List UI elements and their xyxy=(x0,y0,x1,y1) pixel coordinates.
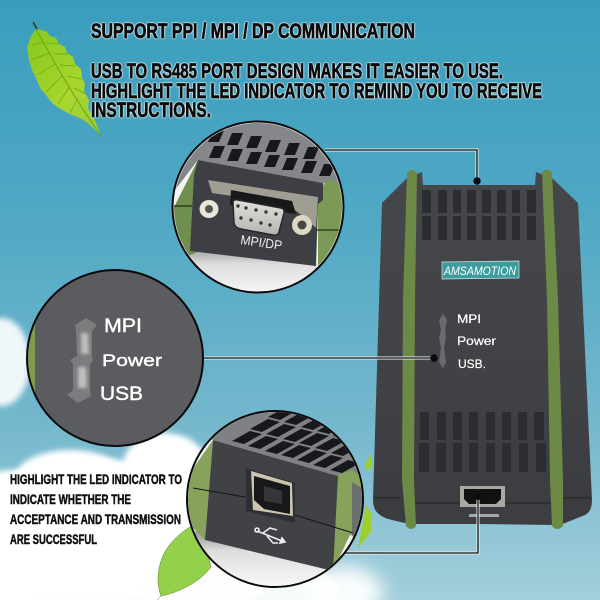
bottom vents xyxy=(419,412,546,472)
slots xyxy=(208,130,335,176)
USB port xyxy=(460,486,505,517)
light pipes xyxy=(67,318,97,403)
top vents xyxy=(422,190,536,240)
brand label: AMSAMOTION xyxy=(443,266,517,278)
clouds xyxy=(0,318,383,600)
LED caption: ACCEPTANCE AND TRANSMISSION xyxy=(10,511,181,527)
device lower front band xyxy=(414,478,553,524)
brand label xyxy=(442,261,519,279)
right green strap xyxy=(542,170,563,529)
device xyxy=(373,170,592,529)
slots xyxy=(232,412,356,473)
leaf fragments behind USB circle xyxy=(358,453,372,548)
white shelf xyxy=(184,247,318,282)
MPI Power USB labels xyxy=(100,316,162,405)
heading and description: SUPPORT PPI / MPI / DP COMMUNICATION xyxy=(91,20,415,43)
leaf bottom centre xyxy=(157,527,211,600)
white shelf xyxy=(194,531,330,586)
heading and description: INSTRUCTIONS. xyxy=(91,99,211,122)
seams xyxy=(172,206,345,230)
LED labels: USB. xyxy=(458,357,486,371)
MPI/DP label: MPI/DP xyxy=(240,232,283,253)
top surface xyxy=(176,123,340,188)
MPI Power USB labels: Power xyxy=(102,351,162,370)
left green strap xyxy=(402,170,417,529)
MPI Power USB labels: MPI xyxy=(104,316,142,337)
USB symbol xyxy=(255,528,285,543)
heading and description xyxy=(91,20,542,122)
connector: USB circle to device xyxy=(345,494,481,553)
right green strap xyxy=(318,178,342,266)
circle: USB port xyxy=(185,407,365,590)
circle: LED indicators xyxy=(27,270,203,446)
top surface xyxy=(212,412,362,488)
LED caption xyxy=(10,471,182,547)
device body xyxy=(373,172,592,525)
LED caption: INDICATE WHETHER THE xyxy=(10,491,131,507)
connector: LED circle to device xyxy=(203,354,438,362)
LED labels xyxy=(457,312,496,371)
right green strap xyxy=(333,470,362,564)
LED labels: MPI xyxy=(457,312,481,326)
front face xyxy=(190,160,323,266)
left green strap xyxy=(174,160,198,256)
connector: MPI/DP circle to device xyxy=(325,150,481,185)
seam xyxy=(193,488,353,533)
USB-B socket xyxy=(246,468,295,523)
MPI Power USB labels: USB xyxy=(100,384,143,405)
front face xyxy=(205,440,338,571)
LED strip xyxy=(439,314,447,368)
LED caption: HIGHLIGHT THE LED INDICATOR TO xyxy=(10,471,182,487)
left green strap xyxy=(188,440,213,540)
db9 connector xyxy=(200,180,318,235)
leaf top left xyxy=(27,22,101,136)
circle: MPI/DP port xyxy=(170,120,345,300)
LED labels: Power xyxy=(457,334,496,348)
LED caption: ARE SUCCESSFUL xyxy=(10,531,97,547)
